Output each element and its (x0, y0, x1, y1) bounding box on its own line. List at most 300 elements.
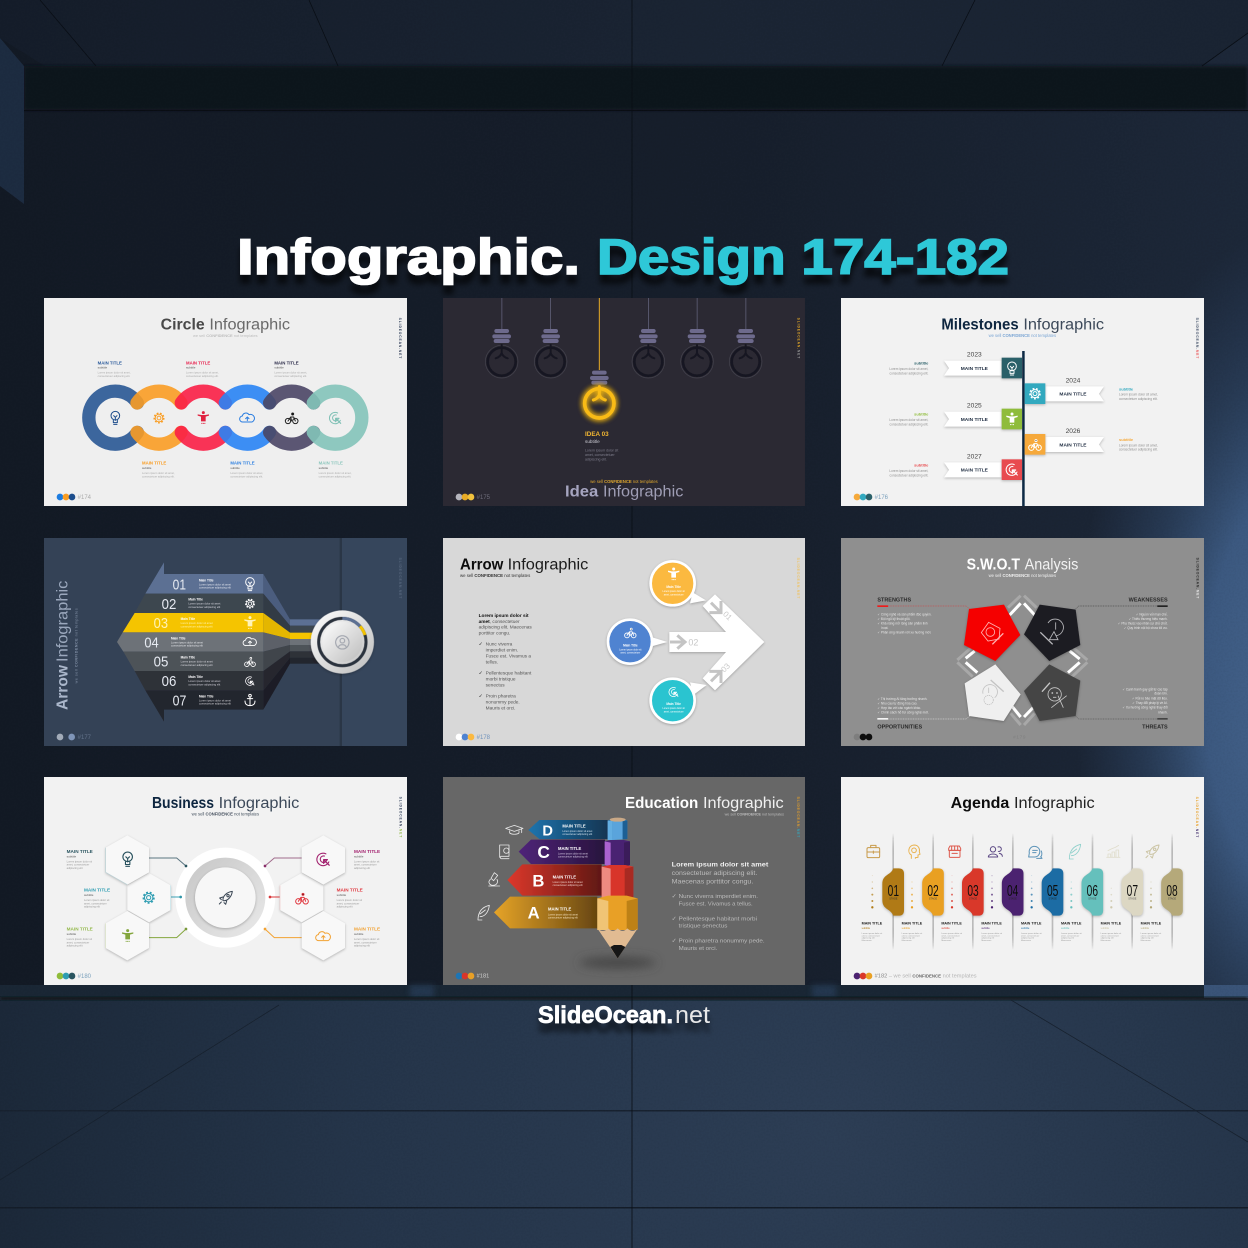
brand tag: SLIDEOCEAN.NET (796, 558, 800, 598)
body copy: Pellentesque habitant morbi (679, 916, 757, 922)
column 01: 01 (888, 883, 899, 900)
body copy: ✓ (672, 916, 677, 922)
band 05: consectetuer adipiscing elit (181, 663, 213, 667)
column 05: subtitle (1021, 926, 1030, 930)
band 02: consectetuer adipiscing elit (188, 605, 220, 609)
body copy: Nunc viverra imperdiet enim. (679, 894, 758, 900)
band 02: 02 (162, 597, 176, 613)
left labels: Lorem ipsum dolor sit (67, 937, 92, 941)
panel: swot analysis #179 (841, 538, 1204, 746)
body copy: Lorem ipsum dolor sit amet (672, 862, 769, 869)
footer badge: #179 (1013, 734, 1026, 739)
body copy: Mauris et orci. (679, 946, 718, 952)
bubble: yellow (651, 561, 706, 605)
body copy: tellus. (486, 659, 498, 665)
top labels: MAIN TITLE (274, 360, 299, 365)
heading (941, 316, 1104, 338)
heading (967, 556, 1079, 578)
column 05: 05 (1047, 883, 1059, 900)
right labels: adipiscing elit (354, 944, 370, 948)
body copy (479, 613, 532, 712)
footer badge: #174 (78, 495, 92, 501)
column 06: Lorem ipsum dolor sit (1061, 932, 1082, 935)
footer badge: #180 (78, 974, 92, 980)
column 08 (1141, 845, 1183, 942)
milestone 2024 (1025, 377, 1158, 404)
strengths block: ✓ Phản ứng nhanh với xu hướng mới. (877, 631, 931, 635)
column 08: Maecenas (1141, 940, 1151, 942)
idea text (585, 431, 618, 462)
heading: Business (152, 795, 214, 812)
timeline axis (1022, 351, 1025, 506)
left labels: Lorem ipsum dolor sit (67, 859, 92, 863)
bubble: teal (651, 679, 707, 723)
milestone 2027: MAIN TITLE (961, 468, 989, 474)
opportunities block: ✓ Nhu cầu tự động hóa cao. (877, 702, 917, 706)
band 01: Main Title (199, 578, 214, 582)
milestone 2025: Lorem ipsum dolor sit amet, (889, 418, 928, 422)
column 01: Lorem ipsum dolor sit (862, 932, 883, 935)
band 05: 05 (154, 655, 168, 671)
heading (rotated) (55, 580, 79, 710)
left labels: subtitle (84, 893, 94, 897)
heading: we sell CONFIDENCE not templates (989, 333, 1056, 338)
footer badge (57, 734, 92, 741)
strengths block: ✓ Đội ngũ kỹ thuật giỏi. (877, 617, 910, 621)
body copy (672, 862, 769, 952)
band 04: 04 (144, 635, 159, 651)
milestone 2027: Lorem ipsum dolor sit amet, (889, 469, 928, 473)
band 06: Lorem ipsum dolor sit amet (188, 679, 221, 683)
hexagons (106, 835, 345, 960)
bubble: yellow: Lorem ipsum dolor sit (663, 590, 685, 593)
ribbon D: Lorem ipsum dolor sit amet (562, 830, 593, 833)
column 02: Lorem ipsum dolor sit (902, 932, 923, 935)
bottom labels: consectetuer adipiscing elit. (142, 474, 175, 478)
brand tag: SLIDEOCEAN. NET (796, 318, 800, 358)
opportunities block (877, 697, 970, 731)
column 07 (1101, 845, 1143, 942)
column 01: adipiscing elit (862, 937, 875, 940)
column 05: amet, consectetuer (1021, 934, 1040, 937)
bottom labels: Lorem ipsum dolor sit amet, (319, 471, 352, 475)
column 05: MAIN TITLE (1021, 921, 1042, 925)
ribbon A: consectetuer adipiscing elit (548, 916, 578, 919)
idea text: subtitle (585, 439, 600, 444)
ribbon C: MAIN TITLE (558, 846, 582, 851)
ribbon B (507, 864, 602, 896)
ribbon D: MAIN TITLE (562, 824, 586, 829)
bubble: teal: amet, consectetuer (664, 710, 684, 713)
band 01: 01 (173, 577, 186, 593)
column 04: 04 (1007, 883, 1019, 900)
heading (161, 316, 290, 338)
threats block: ✓ Thay đổi pháp lý về AI. (1132, 701, 1168, 705)
heading (460, 556, 589, 578)
ribbon A: MAIN TITLE (548, 907, 572, 912)
body copy: Mauris et orci. (486, 706, 515, 712)
heading: we sell CONFIDENCE not templates (989, 573, 1056, 578)
body copy: Pellentesque habitant (486, 671, 532, 677)
ribbon C: C (537, 842, 550, 862)
connectors (145, 858, 306, 938)
band 04: Main Title (171, 636, 186, 640)
footer wordmark: SlideOcean. (538, 1002, 673, 1029)
strengths block: ✓ Công nghệ và sản phẩm độc quyền. (877, 612, 932, 616)
band 03: Main Title (181, 617, 195, 621)
right labels: subtitle (337, 893, 346, 897)
ribbon B: MAIN TITLE (553, 874, 576, 879)
main title: Infographic. (237, 229, 580, 285)
bottom labels: MAIN TITLE (319, 461, 343, 466)
ribbon C: Lorem ipsum dolor sit amet (558, 853, 588, 856)
threats block: ✓ Cạnh tranh gay gắt từ các tập (1122, 687, 1168, 692)
bubble: blue (608, 620, 667, 664)
milestone 2025 (889, 403, 1022, 429)
column 07: STAGE (1128, 898, 1137, 901)
band 02 (135, 594, 263, 613)
heading: we sell CONFIDENCE not templates (192, 812, 259, 817)
ribbon C (519, 840, 605, 864)
milestone 2027: 2027 (967, 453, 982, 460)
threats block: ✓ Xu hướng công nghệ thay đổi (1122, 706, 1168, 710)
big white arrow: 02 (688, 637, 698, 647)
heading (rotated): we sell CONFIDENCE not templates (75, 608, 79, 683)
band 02: Main Title (188, 598, 203, 602)
column 03: MAIN TITLE (941, 921, 962, 925)
column 03: amet, consectetuer (941, 934, 960, 937)
column 04: MAIN TITLE (981, 921, 1002, 925)
right labels: Lorem ipsum dolor sit (354, 937, 380, 941)
body copy: ✓ (479, 671, 483, 677)
band 07: Main Title (199, 694, 214, 698)
column 08: STAGE (1168, 898, 1176, 901)
bottom labels (142, 461, 352, 478)
band 01 (145, 562, 263, 594)
footer badge (456, 734, 491, 741)
milestone 2025: consectetuer adipiscing elit. (890, 422, 928, 426)
column 05 (1021, 846, 1063, 942)
column 01: MAIN TITLE (862, 921, 883, 925)
left labels: amet, consectetuer (84, 901, 107, 905)
column 03: subtitle (941, 926, 950, 930)
brand tag: SLIDEOCEAN. NET (1195, 318, 1199, 358)
column 03: adipiscing elit (941, 937, 955, 940)
column 06: 06 (1087, 883, 1098, 900)
top labels: MAIN TITLE (98, 360, 122, 365)
right labels: subtitle (354, 854, 364, 858)
column 03: Maecenas (941, 940, 951, 942)
band 06 (135, 671, 263, 690)
strengths pentagon (964, 605, 1020, 661)
column 03: STAGE (969, 898, 977, 901)
column 06: subtitle (1061, 926, 1070, 930)
left labels: adipiscing elit (84, 905, 100, 909)
column 08: MAIN TITLE (1141, 921, 1162, 925)
bubble: teal: Lorem ipsum dolor sit (663, 707, 685, 710)
body copy: ✓ (672, 939, 677, 945)
heading: we sell CONFIDENCE not templates (460, 573, 530, 578)
brand tag: SLIDEOCEAN.NET (398, 318, 402, 358)
column 05: Maecenas (1021, 940, 1031, 942)
footer badge (854, 734, 1026, 740)
footer badge (456, 973, 489, 980)
milestone 2024: 2024 (1066, 377, 1081, 384)
band 06: consectetuer adipiscing elit (188, 682, 220, 686)
body copy: Nunc viverra (486, 642, 513, 648)
column 06 (1061, 844, 1103, 942)
column 01: amet, consectetuer (862, 934, 880, 937)
column 08: subtitle (1141, 926, 1150, 930)
side icons (478, 825, 523, 920)
band 01: consectetuer adipiscing elit (199, 586, 231, 590)
heading: Infographic (209, 316, 290, 333)
footer badge: #182 – we sell CONFIDENCE not templates (875, 974, 977, 980)
idea text: adipiscing elit. (585, 458, 607, 462)
weaknesses block: ✓ Quy trình nội bộ chưa tối ưu. (1124, 626, 1168, 630)
band 07: Lorem ipsum dolor sit amet (199, 698, 231, 702)
big white arrow (669, 594, 764, 690)
idea text: amet, consectetuer (585, 453, 615, 457)
milestone 2027 (889, 453, 1022, 480)
bottom labels: consectetuer adipiscing elit. (319, 474, 352, 478)
milestone 2023: Lorem ipsum dolor sit amet, (889, 367, 928, 371)
band 04: consectetuer adipiscing elit (171, 644, 203, 648)
body copy: porttitor congu. (479, 631, 510, 637)
right labels: MAIN TITLE (354, 849, 380, 854)
right labels: amet, consectetuer (354, 940, 377, 944)
left labels: subtitle (67, 932, 76, 936)
column 07: adipiscing elit (1101, 937, 1114, 940)
column 03 (941, 846, 984, 942)
milestone 2026: Lorem ipsum dolor sit amet, (1119, 443, 1158, 447)
ribbon A: A (528, 904, 540, 923)
top labels: consectetuer adipiscing elit. (274, 374, 307, 378)
threats block: đoàn lớn. (1154, 692, 1168, 696)
column 07: amet, consectetuer (1101, 934, 1119, 937)
left labels: subtitle (67, 854, 76, 858)
right labels (337, 849, 380, 948)
milestone 2024: subtitle (1119, 386, 1134, 391)
column 08: adipiscing elit (1141, 937, 1154, 940)
footer badge (854, 494, 889, 501)
column 04 (981, 847, 1023, 942)
band 05: Lorem ipsum dolor sit amet (181, 660, 213, 664)
body copy: Fusce est. Vivamus a (486, 653, 531, 659)
column 02: MAIN TITLE (902, 921, 923, 925)
footer badge: #176 (875, 495, 889, 501)
footer badge: #181 (477, 974, 489, 980)
big white arrow: 01 (721, 610, 734, 623)
column 02: subtitle (902, 926, 911, 930)
chevron accents (957, 596, 1087, 725)
column 07: Maecenas (1101, 940, 1111, 942)
milestone 2023 (889, 352, 1022, 378)
bubble: blue: Main Title (623, 643, 638, 647)
weaknesses block: ✓ Phụ thuộc vào nhân sự chủ chốt. (1118, 621, 1168, 625)
panel: circle infographic #174 (44, 298, 407, 506)
right labels: MAIN TITLE (354, 926, 380, 931)
chain of rings (89, 391, 362, 444)
bubble: teal: Main Title (666, 702, 681, 706)
ribbon B: Lorem ipsum dolor sit amet (553, 881, 583, 884)
opportunities block: ✓ Thị trường AI tăng trưởng nhanh. (877, 697, 928, 701)
column 08: 08 (1166, 883, 1178, 900)
right labels: Lorem ipsum dolor sit (337, 898, 362, 902)
ribbon D: consectetuer adipiscing elit (562, 833, 592, 836)
milestone 2025: subtitle (914, 412, 929, 417)
threats block: nhanh. (1158, 710, 1168, 714)
milestone 2026: consectetuer adipiscing elit. (1119, 448, 1158, 452)
band 04: Lorem ipsum dolor sit amet (171, 640, 203, 644)
pencil shadow (579, 957, 656, 968)
milestone 2024: Lorem ipsum dolor sit amet, (1119, 393, 1158, 397)
band 07: 07 (173, 693, 186, 709)
brand tag: SLIDEOCEAN. NET (1195, 797, 1199, 837)
ribbon B: B (532, 871, 544, 890)
bottom labels: Lorem ipsum dolor sit amet, (142, 471, 175, 475)
heading (951, 795, 1095, 812)
column 02 (902, 845, 944, 942)
top labels: subtitle (98, 366, 107, 370)
right labels: amet, consectetuer (354, 863, 377, 867)
brand tag: SLIDEOCEAN. NET (796, 797, 800, 837)
heading: Infographic (703, 795, 784, 812)
band 05: Main Title (181, 656, 195, 660)
heading: Idea (565, 483, 599, 500)
body copy: ✓ (479, 642, 483, 648)
heading (565, 479, 684, 500)
column 01: STAGE (889, 898, 898, 901)
column 03: Lorem ipsum dolor sit (941, 932, 962, 935)
left labels: amet, consectetuer (67, 940, 89, 944)
body copy: morbi tristique (486, 677, 516, 683)
column 01: subtitle (862, 926, 871, 930)
heading: we sell CONFIDENCE not templates (590, 479, 658, 484)
left labels: MAIN TITLE (84, 888, 110, 893)
column 04: subtitle (981, 926, 990, 930)
heading: Infographic (508, 556, 589, 573)
milestone 2023: subtitle (914, 361, 929, 366)
hub knob (311, 610, 374, 674)
right labels: Lorem ipsum dolor sit (354, 859, 380, 863)
bottom labels: subtitle (319, 466, 328, 470)
brand tag: SLIDEOCEAN. NET (1196, 558, 1200, 598)
body copy: ✓ (479, 694, 483, 700)
column 06: adipiscing elit (1061, 937, 1074, 940)
column 07: subtitle (1101, 926, 1110, 930)
body copy: imperdiet enim. (486, 648, 518, 654)
panel: idea infographic #175 (443, 298, 805, 506)
heading: Arrow (460, 556, 503, 573)
milestone 2027: consectetuer adipiscing elit. (890, 473, 928, 477)
weaknesses block: WEAKNESSES (1129, 598, 1168, 604)
strengths block (877, 598, 970, 635)
band 07 (145, 690, 263, 722)
bottom labels: subtitle (230, 466, 240, 470)
column 04: amet, consectetuer (981, 934, 1000, 937)
bubble: yellow: amet, consectetuer (664, 593, 684, 596)
body copy: Fusce est. Vivamus a tellus. (679, 902, 753, 908)
column 06: amet, consectetuer (1061, 934, 1080, 937)
column 02: adipiscing elit (902, 937, 915, 940)
threats pentagon (1024, 664, 1080, 721)
heading: we sell CONFIDENCE not templates (725, 813, 784, 817)
heading: S.W.O.T (967, 556, 1021, 573)
right labels: subtitle (354, 932, 364, 936)
body copy: adipiscing elit. Maecenas (479, 625, 532, 631)
heading: Agenda (951, 795, 1010, 812)
column 08: Lorem ipsum dolor sit (1141, 932, 1162, 935)
ribbon D: D (542, 824, 553, 840)
right labels: amet, consectetuer (337, 901, 359, 905)
band 01: Lorem ipsum dolor sit amet (199, 582, 231, 586)
right labels: adipiscing elit (354, 866, 370, 870)
footer badge (57, 494, 92, 501)
body copy: Proin pharetra (486, 694, 516, 700)
threats block (1075, 687, 1168, 731)
heading: Infographic (1014, 795, 1095, 812)
bottom labels: Lorem ipsum dolor sit amet, (230, 471, 263, 475)
column rules (892, 833, 1173, 950)
body copy: Maecenas porttitor congu. (672, 878, 754, 885)
column 04: STAGE (1009, 898, 1017, 901)
column 02: STAGE (929, 898, 937, 901)
threats block: THREATS (1142, 725, 1168, 731)
central hub (175, 848, 275, 948)
footer badge: #178 (477, 735, 491, 741)
band 06: Main Title (188, 675, 203, 679)
top labels: MAIN TITLE (186, 360, 210, 365)
bottom labels: subtitle (142, 466, 152, 470)
left labels: adipiscing elit (67, 944, 83, 948)
weaknesses pentagon (1024, 605, 1080, 661)
column 06: STAGE (1088, 898, 1097, 901)
strengths block: hoạt. (881, 626, 888, 630)
opportunities block: OPPORTUNITIES (877, 725, 922, 731)
body copy: nonummy pede. (486, 700, 520, 706)
bottom labels: consectetuer adipiscing elit. (230, 474, 263, 478)
band 04 (117, 632, 263, 652)
idea text: IDEA 03 (585, 431, 609, 438)
panel: milestones infographic #176 (841, 298, 1204, 506)
top labels: Lorem ipsum dolor sit amet, (98, 371, 131, 375)
milestone 2023: 2023 (967, 352, 982, 359)
bottom labels: MAIN TITLE (230, 461, 255, 466)
ribbon C: consectetuer adipiscing elit (558, 856, 588, 859)
body copy: Lorem ipsum dolor sit (479, 613, 529, 619)
milestone 2027: subtitle (914, 463, 929, 468)
body copy: senectus (486, 683, 505, 689)
footer badge: #175 (477, 495, 491, 501)
strengths block: STRENGTHS (877, 598, 911, 604)
top labels: Lorem ipsum dolor sit amet, (186, 371, 219, 375)
bubble: yellow: Main Title (666, 585, 681, 589)
column 04: Lorem ipsum dolor sit (981, 932, 1002, 935)
heading: Analysis (1025, 556, 1079, 573)
band 05 (123, 652, 263, 671)
hexagon icons (122, 852, 330, 941)
lit bulb (585, 298, 614, 418)
milestone 2025: 2025 (967, 403, 982, 410)
footer badge: #177 (78, 735, 92, 741)
band 03 (123, 613, 263, 632)
pencil (597, 818, 638, 958)
body copy: Proin pharetra nonummy pede. (679, 939, 765, 945)
heading: Infographic (1023, 316, 1104, 333)
panel: arrow infographic #178 (443, 538, 805, 746)
milestone 2023: consectetuer adipiscing elit. (890, 371, 928, 375)
